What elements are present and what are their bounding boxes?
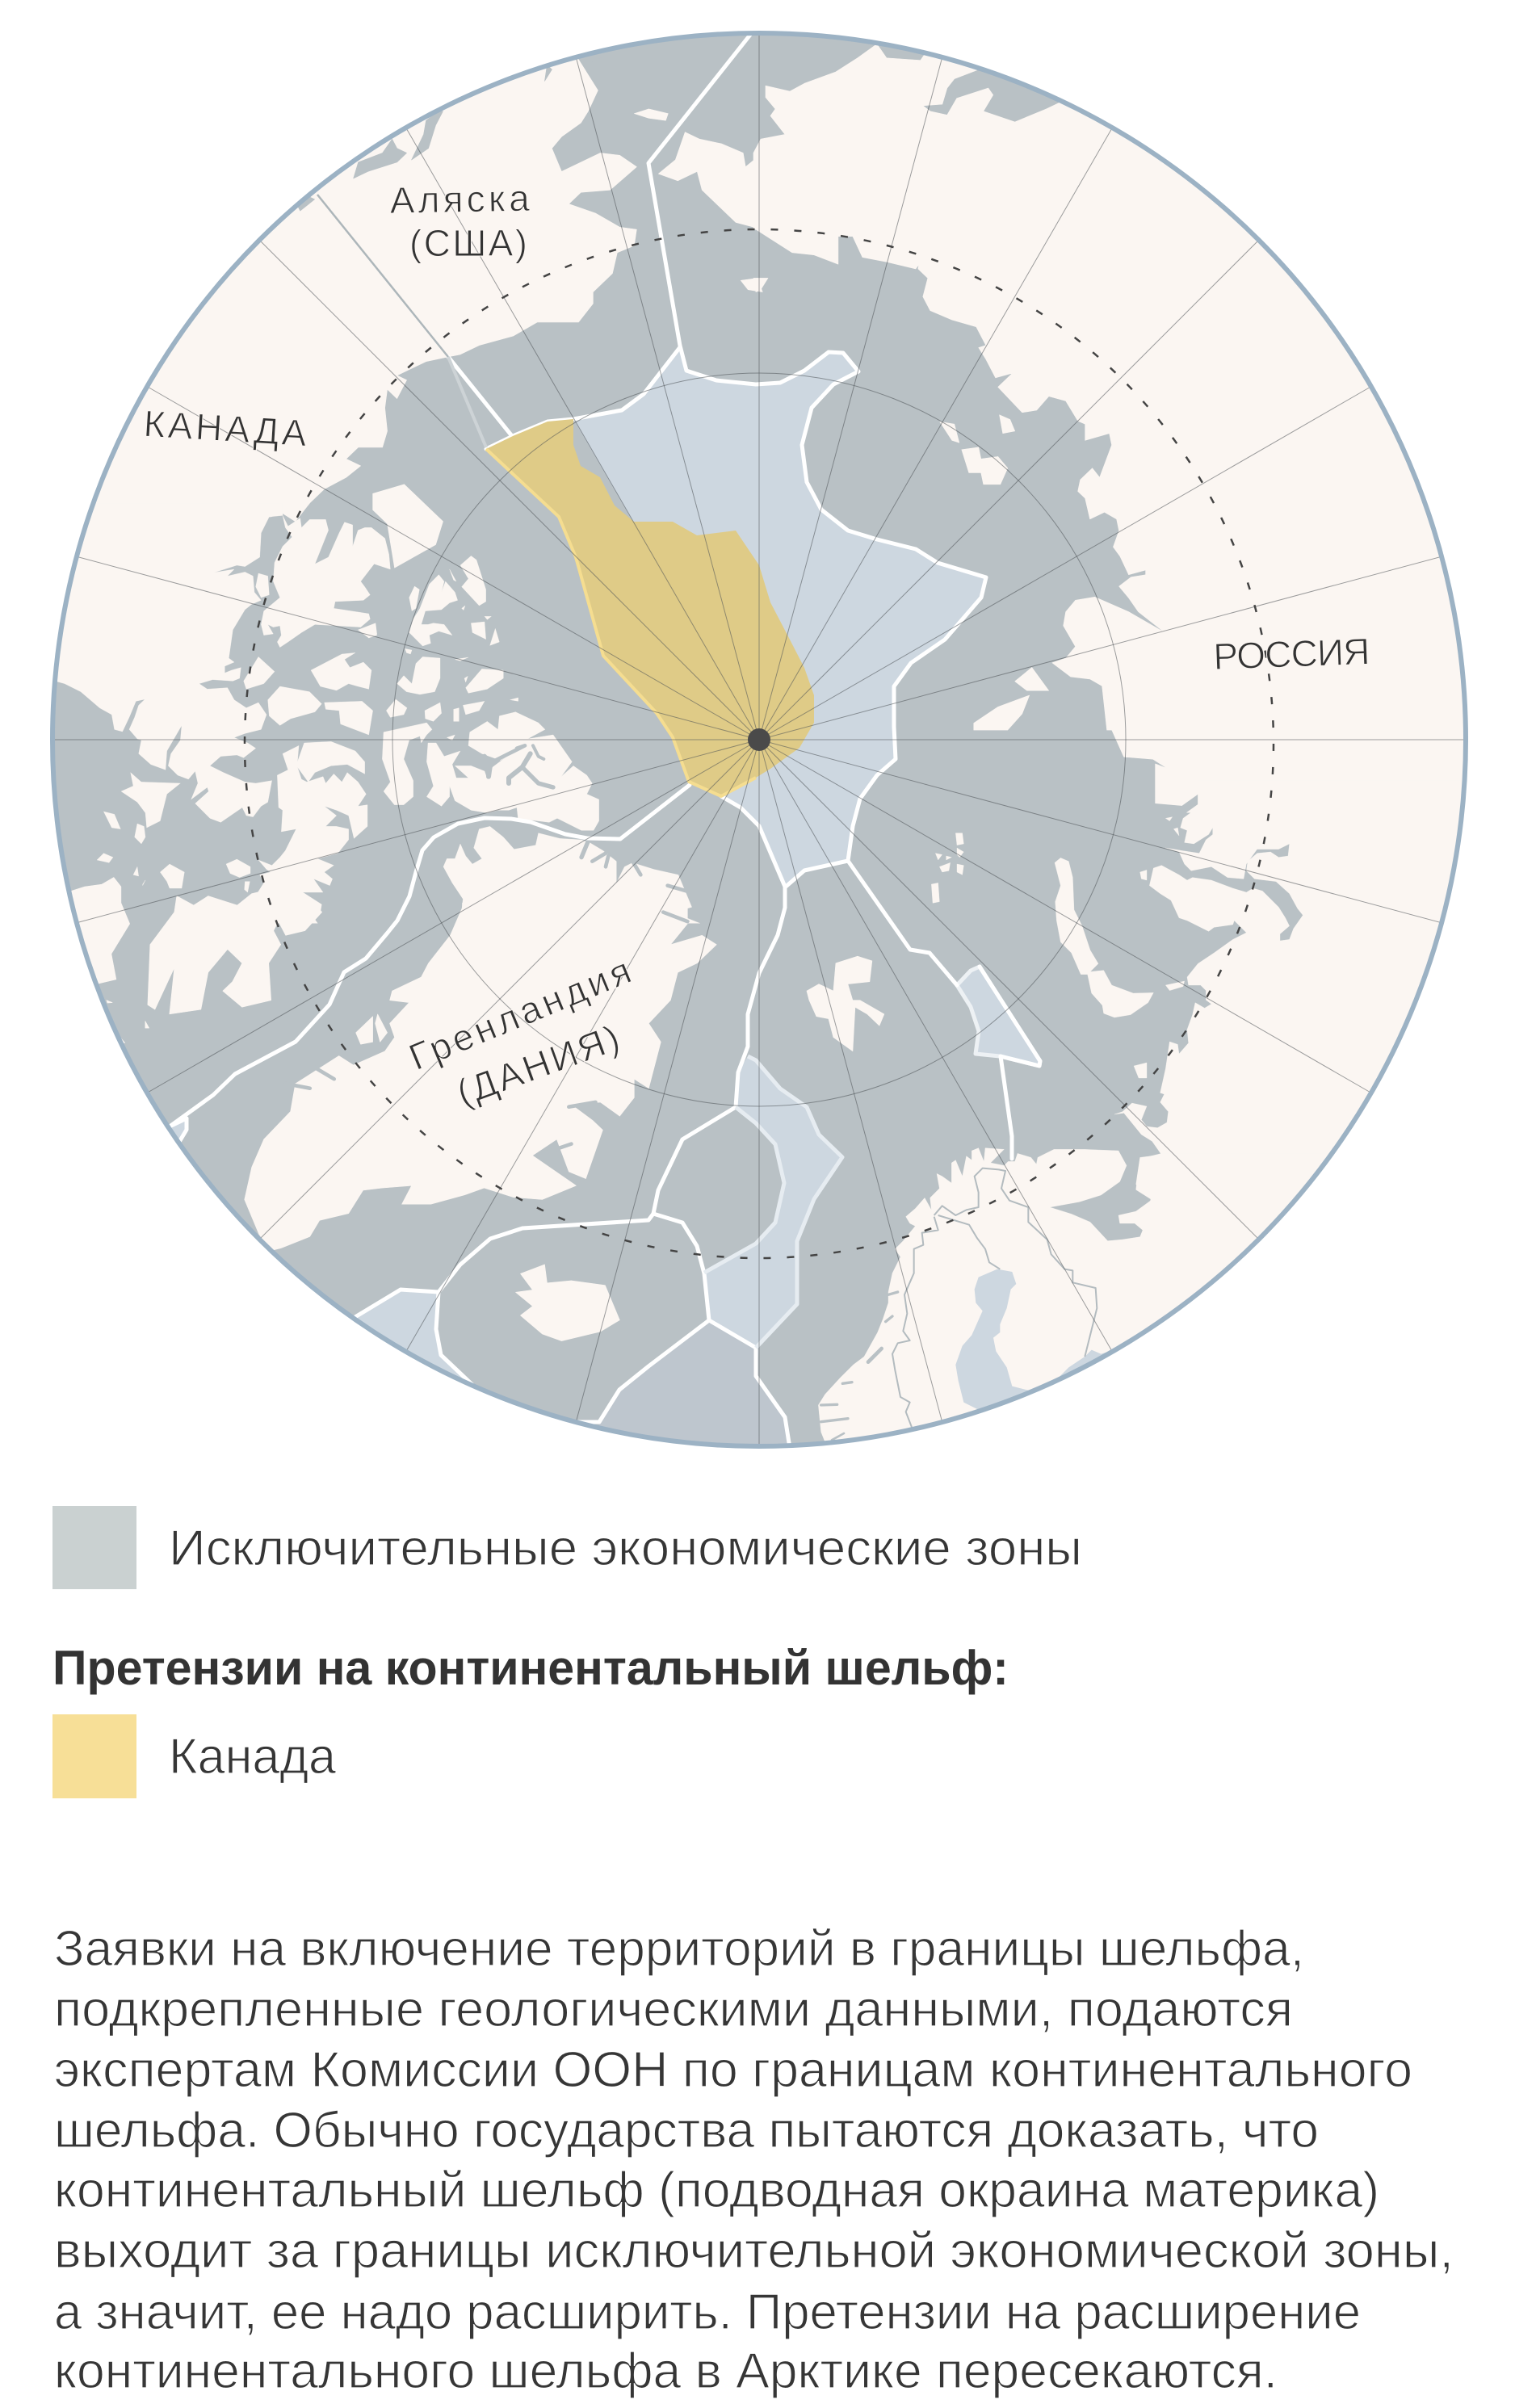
fjords on the Norwegian coast: [821, 1292, 898, 1440]
Arctic circle dashed line: [245, 229, 1274, 1258]
land: Scandinavia and Kola: [818, 1148, 1515, 1480]
small islet: [143, 880, 145, 886]
explanatory paragraph: Заявки на включение территорий в границы шельфа,: [54, 1921, 1304, 1977]
New Siberian islands: [940, 422, 959, 443]
St Lawrence island: [634, 109, 668, 120]
EEZ boundary lines: [170, 35, 1040, 1448]
high-seas zone: Barents sea: [957, 967, 1040, 1066]
polar map of the Arctic: [50, 31, 1468, 1449]
Canadian mainland: [57, 512, 283, 822]
land: Canadian west archipelago: [57, 512, 391, 924]
Iceland: [515, 1265, 619, 1341]
explanatory paragraph: шельфа. Обычно государства пытаются доказать, что: [54, 2103, 1319, 2158]
boundary extension at sea: [448, 357, 486, 447]
lighter EEZ lines: [704, 1056, 842, 1348]
land: Queen Elizabeth islands and north Greenland: [358, 556, 700, 923]
legend text: exclusive economic zones: Исключительные экономические зоны: [169, 1521, 1082, 1576]
label: Canada: КАНАДА: [142, 402, 308, 454]
legend heading: Претензии на континентальный шельф:: [52, 1641, 1009, 1695]
Vaygach: [1165, 981, 1185, 991]
high-seas zone: Labrador: [162, 1118, 187, 1142]
label: Greenland: Гренландия: [403, 949, 637, 1078]
Bely island: [1140, 870, 1147, 880]
label: Russia: РОССИЯ: [1213, 630, 1370, 678]
small islet: [245, 882, 250, 892]
explanatory paragraph: подкрепленные геологическими данными, подаются: [54, 1982, 1293, 2037]
map outer ring: [52, 33, 1466, 1446]
Labrador edge: [63, 878, 130, 984]
graticule meridians and parallels: [52, 32, 1467, 1447]
Novaya Zemlya: [1055, 858, 1153, 1017]
land: south-west quadrant: [63, 878, 716, 1341]
high-seas zone: Norwegian sea: [704, 1056, 842, 1348]
Alaska-Canada border: [317, 195, 448, 357]
small island in the channel: [256, 573, 269, 598]
Boothia island: [325, 701, 373, 735]
claim edge highlight: [486, 449, 756, 796]
small islet: [133, 866, 139, 876]
Banks island: [373, 485, 443, 568]
inlets of Baffin and Greenland: [286, 912, 687, 1156]
Melville island: [409, 575, 458, 646]
sea notches: north-west quadrant: [298, 67, 552, 212]
swatch: exclusive economic zones: [52, 1506, 136, 1589]
bluish zone south of Iceland: [599, 1320, 791, 1454]
small islands west: [145, 1021, 149, 1028]
sea background: [52, 33, 1466, 1446]
Siberia mainland: [753, 0, 1515, 730]
legend text: Canada: Канада: [169, 1729, 337, 1785]
Disko island: [356, 1017, 373, 1044]
Hudson bay island B: [97, 854, 113, 862]
Southampton peninsula island: [121, 773, 180, 828]
Hudson bay island A: [103, 812, 120, 829]
islet: [368, 634, 377, 638]
Kolguev: [1134, 1063, 1147, 1078]
Russian Arctic coast with Yamal and Ob gulf: [1114, 781, 1515, 1211]
Ellesmere island: [426, 712, 599, 830]
land: north-east quadrant: [753, 0, 1515, 730]
explanatory paragraph: континентальный шельф (подводная окраина материка): [54, 2163, 1379, 2218]
explanatory paragraph: экспертам Комиссии ООН по границам континентального: [54, 2042, 1412, 2098]
Severnaya Zemlya islands: [1015, 668, 1049, 690]
national borders in Scandinavia: [892, 1168, 1097, 1429]
Canadian continental shelf claim: [486, 419, 814, 796]
Akpatok island: [160, 864, 184, 888]
Baffin island, lower part: [148, 889, 322, 1014]
Bathurst island: [460, 556, 486, 606]
land: Svalbard: [807, 956, 884, 1051]
Devon-side island: [397, 657, 440, 694]
King William island: [268, 686, 321, 725]
Greenland, north part: [443, 826, 700, 923]
land: Siberia top of south-east quadrant: [1110, 724, 1515, 812]
explanatory paragraph: [54, 1921, 1454, 2399]
Somerset island: [311, 652, 371, 690]
Victoria island group: [261, 515, 390, 648]
fjords of Ellesmere and north Greenland: [468, 745, 686, 912]
North Pole dot: [748, 728, 770, 751]
explanatory paragraph: а значит, ее надо расширить. Претензии на расширение: [54, 2284, 1361, 2340]
land: Kara sea and Barents coast: [931, 781, 1515, 1211]
Wrangel island east part: [753, 278, 768, 292]
label: Alaska: (США): [409, 222, 527, 264]
Baltic sea: [955, 1269, 1117, 1413]
high-seas zone around the pole: [573, 347, 986, 887]
Chukotka tip: [658, 132, 753, 228]
legend: [52, 1506, 1082, 1798]
Coats island: [135, 824, 145, 844]
land: north-west quadrant: [95, 59, 762, 568]
Axel Heiberg side island: [466, 669, 503, 693]
Franz Josef Land: [955, 833, 963, 845]
swatch: Canada: [52, 1714, 136, 1798]
high-seas zone: south-west: [354, 1290, 472, 1385]
label: Alaska: [389, 177, 531, 264]
Resolution island: [226, 859, 250, 878]
label: Alaska: Аляска: [389, 177, 531, 221]
Devon island: [382, 723, 432, 805]
Prince of Wales island: [244, 657, 275, 689]
Alaska and northern Canada, upper part: [95, 59, 637, 522]
Wrangel island: [741, 278, 762, 292]
explanatory paragraph: выходит за границы исключительной экономической зоны,: [54, 2223, 1454, 2279]
Greenland, south part: [245, 903, 716, 1251]
label: Greenland: (ДАНИЯ): [451, 1017, 625, 1114]
explanatory paragraph: континентального шельфа в Арктике пересекаются.: [54, 2343, 1278, 2399]
Baffin island, upper part: [257, 741, 367, 923]
